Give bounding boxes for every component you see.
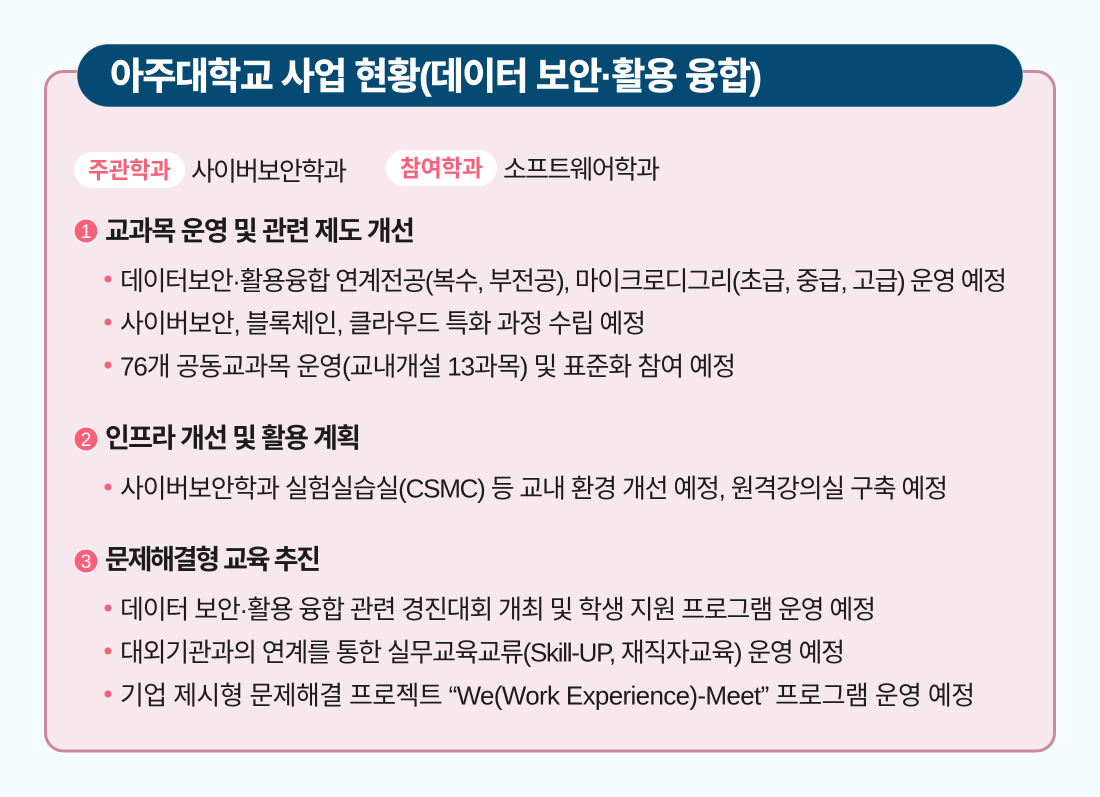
list item 1-3: 76개 공동교과목 운영(교내개설 13과목) 및 표준화 참여 예정	[120, 352, 736, 382]
tag: lead department: 주관학과	[88, 157, 171, 183]
list item 3-2: 대외기관과의 연계를 통한 실무교육교류(Skill-UP, 재직자교육) 운영 예정	[120, 638, 845, 668]
text: lead department name: 사이버보안학과	[191, 156, 347, 186]
heading 2: 2	[81, 430, 91, 451]
section 1	[74, 216, 1007, 382]
heading 3: 문제해결형 교육 추진	[105, 545, 321, 575]
list item 3-3: 기업 제시형 문제해결 프로젝트 “We(Work Experience)-Meet” 프로그램 운영 예정	[120, 680, 975, 710]
title banner: 아주대학교 사업 현황(데이터 보안·활용 융합)	[110, 56, 762, 97]
tag: lead department	[74, 152, 185, 188]
tag: participating department: 참여학과	[400, 155, 483, 181]
list item 1-2: 사이버보안, 블록체인, 클라우드 특화 과정 수립 예정	[120, 308, 646, 338]
department row	[74, 150, 660, 188]
heading 3: 3	[81, 552, 91, 573]
heading 1: 1	[81, 222, 91, 243]
text: participating department name: 소프트웨어학과	[503, 154, 660, 184]
section 2	[74, 424, 948, 504]
list item 3-1: 데이터 보안·활용 융합 관련 경진대회 개최 및 학생 지원 프로그램 운영 예정	[120, 594, 876, 624]
section 3	[74, 545, 975, 710]
heading 1: 교과목 운영 및 관련 제도 개선	[105, 216, 415, 246]
tag: participating department	[386, 150, 497, 186]
heading 2: 인프라 개선 및 활용 계획	[105, 424, 361, 454]
list item 2-1: 사이버보안학과 실험실습실(CSMC) 등 교내 환경 개선 예정, 원격강의실 구축 예정	[120, 474, 948, 504]
list item 1-1: 데이터보안·활용융합 연계전공(복수, 부전공), 마이크로디그리(초급, 중급, 고급) 운영 예정	[120, 266, 1007, 296]
panel: main content card	[46, 72, 1054, 751]
title banner	[77, 44, 1023, 107]
